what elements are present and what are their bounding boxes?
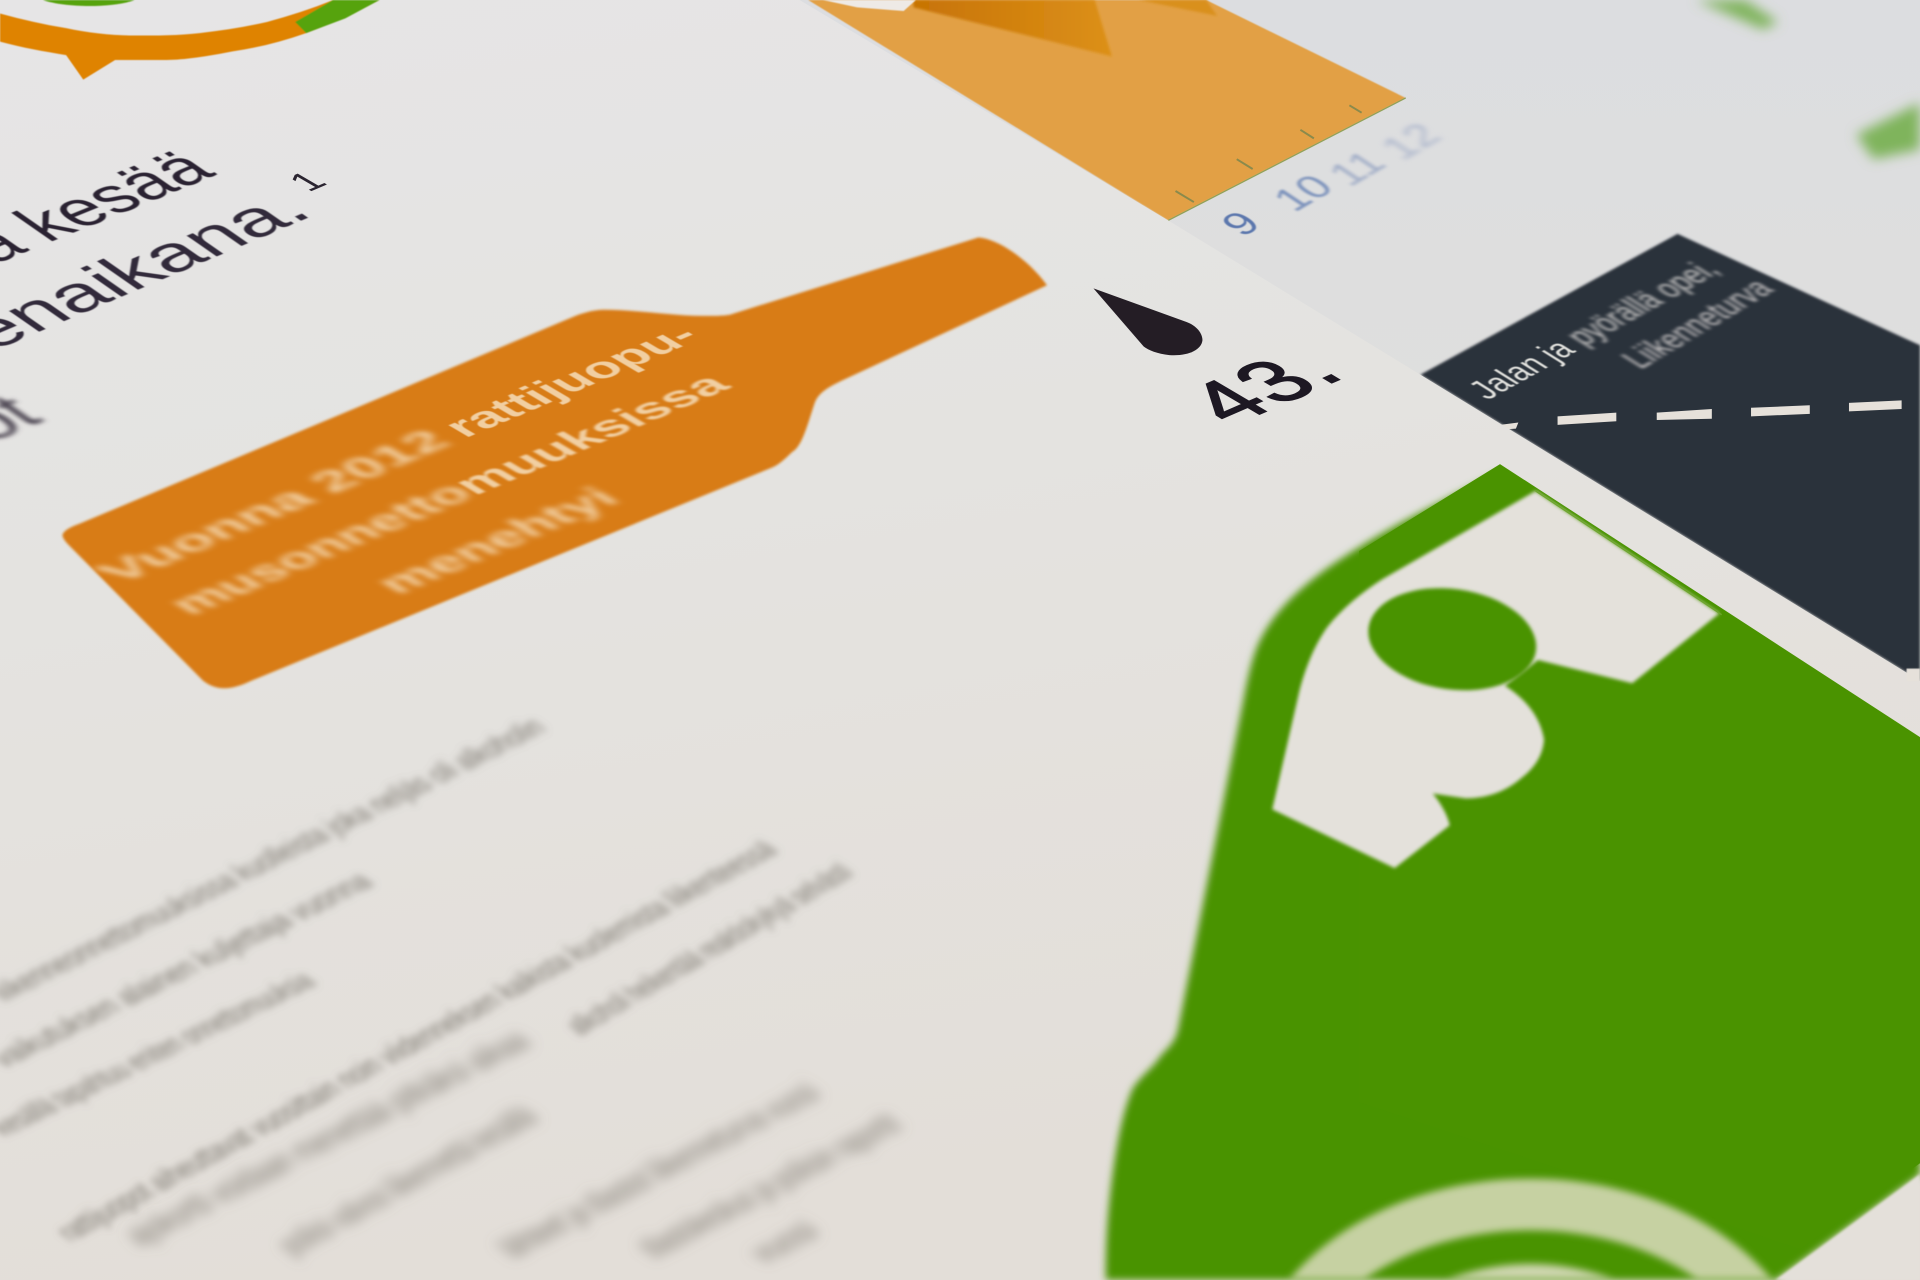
bottle text: Vuonna 2012 — [87, 424, 461, 589]
page marker drop — [1093, 288, 1202, 355]
donut inner green blob — [43, 0, 135, 6]
blurred body text: alkoholi heikentää reaktiokykyä selvästi — [557, 857, 860, 1040]
road panel caption: Jalan ja — [1460, 334, 1584, 405]
bottle text: musonnetto — [158, 476, 483, 621]
car body sharp upper edge — [1359, 464, 1920, 1249]
dark orange triangle in chart — [913, 0, 1112, 56]
road panel caption: pyörällä opei, — [1556, 254, 1728, 351]
page number: 43. — [1164, 336, 1365, 436]
car body — [1106, 474, 1920, 1280]
paper beneath car corner — [1776, 1174, 1920, 1280]
driver head — [1362, 578, 1543, 701]
blurred body text lower rows — [114, 1025, 911, 1268]
blurred body text lower rows: tilastokeskus ja poliisin raportit — [629, 1108, 911, 1264]
bottle text: rattijuopu- — [432, 318, 710, 443]
blurred body text lower rows: vuosi — [739, 1214, 828, 1268]
blurred body text lower rows: ajokortti voidaan menettää pitkäksi aikaa — [114, 1025, 539, 1251]
headline text — [0, 139, 336, 452]
blurred body text: rattijuopot aiheuttavat vuosittain noin viidenneksen kaikista kuolemista liikenteessä — [48, 835, 785, 1246]
blurred body text — [0, 713, 860, 1246]
chart axis labels: 10 — [1263, 168, 1344, 218]
chart axis labels: 11 — [1318, 144, 1396, 193]
navy road panel — [1420, 234, 1920, 681]
blurred body text lower rows: poliisi valvoo liikennettä kesällä — [267, 1100, 547, 1261]
road centre dashes — [1500, 400, 1902, 430]
donut chart fragment — [0, 0, 380, 80]
orange bottle callout — [63, 238, 1047, 688]
wheel inner — [1447, 1264, 1614, 1280]
bottle text: muuksissa — [442, 367, 741, 501]
orange area chart — [808, 0, 1406, 220]
donut green segment — [295, 0, 380, 33]
headline text: 1 — [279, 167, 336, 197]
windscreen thin line — [1536, 491, 1722, 615]
white shape at chart top — [823, 0, 916, 11]
chart axis labels: 9 — [1211, 204, 1271, 243]
bottle text — [87, 318, 741, 621]
chart axis labels: 12 — [1371, 116, 1452, 167]
blurred body text lower rows: lähteet ja tilastot liikenneturva vuosi — [488, 1076, 830, 1264]
white mark at road panel corner — [1907, 669, 1920, 681]
car window and driver cutout — [1272, 491, 1719, 868]
chart axis ticks — [1168, 98, 1406, 220]
blurred body text: liikenneonnettomuuksissa kuolleista joka neljäs oli alkoholin — [0, 713, 553, 1006]
bottle text: menehtyi — [365, 481, 630, 600]
road panel caption: Liikenneturva — [1613, 273, 1782, 374]
chart axis labels — [1211, 116, 1452, 243]
green blurred headings on back page — [1696, 0, 1920, 159]
road panel caption — [1460, 254, 1782, 405]
wheel ring — [1289, 1179, 1772, 1280]
green car icon — [1106, 464, 1920, 1280]
